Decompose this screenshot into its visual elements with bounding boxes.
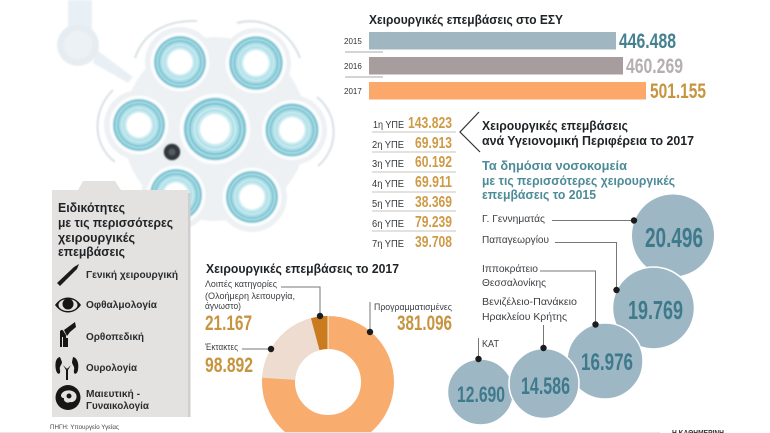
bar 2016: [344, 55, 683, 78]
bar 2017: 2017: [344, 87, 362, 96]
label: urology: Ουρολογία: [86, 362, 138, 374]
panel: specialties: Γυναικολογία: [86, 400, 149, 412]
hospital labels and leaders: [475, 213, 637, 362]
label: general surgery: Γενική χειρουργική: [86, 269, 178, 281]
hospitals heading: με τις περισσότερες χειρουργικές: [482, 173, 675, 188]
label: other categories: [205, 279, 323, 335]
bubble: Παπαγεωργίου: 19.769: [628, 295, 683, 325]
region table: 4η ΥΠΕ: [372, 179, 404, 190]
region table: 3η ΥΠΕ: [372, 159, 404, 170]
label: obstetrics gynecology: Μαιευτική -: [86, 388, 140, 400]
bar 2015: 446.488: [619, 30, 676, 53]
panel background: [52, 181, 188, 417]
label: Ippokrateio: Ιπποκράτειο: [482, 263, 538, 275]
region heading: ανά Υγειονομική Περιφέρεια το 2017: [482, 134, 694, 148]
label: other categories: άγνωστο): [205, 301, 241, 312]
label: Venizeleio: Βενιζέλειο-Πανάκειο: [482, 296, 577, 308]
region table: 6η ΥΠΕ: [372, 219, 404, 230]
region table: 2η ΥΠΕ: [372, 140, 404, 151]
lamp lenses: [110, 32, 322, 226]
source note: ΠΗΓΗ: Υπουργείο Υγείας: [50, 423, 119, 431]
label: orthopedics: Ορθοπεδική: [86, 331, 144, 343]
bar 2017: 501.155: [650, 80, 706, 103]
label: Gennimatas: [482, 213, 637, 225]
bar 2015: [344, 30, 676, 53]
label: other categories: Λοιπές κατηγορίες: [205, 279, 277, 290]
region table: [372, 115, 456, 251]
region table: 69.913: [415, 135, 452, 152]
bubble: Παπαγεωργίου: [612, 267, 694, 349]
bubble: Βενιζέλειο: 14.586: [521, 373, 570, 400]
icon: eye: [55, 298, 81, 312]
region table: 143.823: [408, 115, 452, 132]
panel heading: Ειδικότητες: [58, 200, 125, 215]
region table: 60.192: [415, 154, 452, 171]
hospitals heading: Τα δημόσια νοσοκομεία: [482, 158, 627, 173]
hospitals heading: επεμβάσεις το 2015: [482, 187, 596, 202]
bar chart heading: Χειρουργικές επεμβάσεις στο ΕΣΥ: [369, 12, 563, 27]
label: Venizeleio: [482, 296, 577, 351]
label: emergency: [204, 342, 274, 377]
label: Ippokrateio: Θεσσαλονίκης: [482, 277, 546, 289]
region table: 69.911: [415, 174, 452, 191]
chevron bracket: [460, 112, 480, 152]
bubble: Γ. Γεννηματάς: [632, 194, 714, 276]
bubble: Ιπποκράτειο: 16.976: [581, 349, 633, 376]
bubble: ΚΑΤ: [448, 359, 514, 425]
panel: specialties: με τις περισσότερες: [58, 215, 173, 230]
icon: scalpel: [57, 264, 79, 286]
panel: surgeries by health region: [372, 112, 694, 251]
label: Papageorgiou: Παπαγεωργίου: [482, 234, 549, 246]
hospital bubbles: [448, 194, 714, 425]
lamp camera knob: [164, 144, 180, 160]
region table: 39.708: [415, 234, 452, 251]
label: Papageorgiou: [482, 234, 620, 293]
bar 2015: 2015: [344, 37, 362, 46]
panel: specialties: [52, 181, 190, 417]
region table: 7η ΥΠΕ: [372, 239, 404, 250]
lamp body: [104, 27, 327, 232]
region table: 79.239: [415, 214, 452, 231]
panel: top hospitals: [448, 158, 714, 425]
bubble: ΚΑΤ: 12.690: [457, 382, 505, 407]
label: emergency: 98.892: [205, 354, 253, 377]
icon: kidneys: [55, 357, 78, 380]
bar 2016: 2016: [344, 62, 362, 71]
label: other categories: 21.167: [205, 312, 252, 335]
donut chart: [262, 316, 378, 432]
lamp handles: [97, 21, 334, 166]
panel: specialties: επεμβάσεις: [58, 244, 125, 259]
region table: 38.369: [415, 194, 452, 211]
region heading: [482, 119, 694, 148]
label: scheduled: Προγραμματισμένες: [374, 302, 452, 313]
label: scheduled: 381.096: [397, 312, 452, 335]
bubble: Γ. Γεννηματάς: 20.496: [645, 222, 703, 253]
panel: surgeries 2017 donut: [204, 261, 452, 432]
label: emergency: Έκτακτες: [204, 342, 238, 353]
region table: 1η ΥΠΕ: [373, 120, 404, 131]
lamp arm: [57, 0, 133, 83]
panel: annual surgeries bar chart: [344, 12, 706, 103]
bar 2016: 460.269: [626, 55, 683, 78]
surgical lamp illustration: [57, 0, 334, 232]
label: Ippokrateio: [482, 263, 599, 328]
icon: fetus: [56, 385, 80, 410]
panel: specialties: χειρουργικές: [58, 230, 135, 245]
label: KAT: ΚΑΤ: [482, 339, 499, 350]
footer rule: [0, 432, 660, 433]
label: Gennimatas: Γ. Γεννηματάς: [482, 213, 545, 225]
donut heading: Χειρουργικές επεμβάσεις το 2017: [206, 261, 399, 276]
label: ophthalmology: Οφθαλμολογία: [86, 299, 158, 311]
bar 2017: [344, 80, 706, 103]
region heading: Χειρουργικές επεμβάσεις: [482, 119, 628, 133]
label: KAT: [475, 338, 499, 362]
icon: knee: [60, 322, 76, 347]
label: Venizeleio: Ηρακλείου Κρήτης: [482, 311, 567, 323]
label: other categories: (Ολοήμερη λειτουργία,: [205, 291, 295, 302]
bubble: Βενιζέλειο: [509, 348, 579, 418]
region table: 5η ΥΠΕ: [372, 199, 404, 210]
bubble: Ιπποκράτειο: [567, 323, 643, 399]
label: scheduled: [367, 302, 452, 335]
hospitals heading: [482, 158, 675, 202]
